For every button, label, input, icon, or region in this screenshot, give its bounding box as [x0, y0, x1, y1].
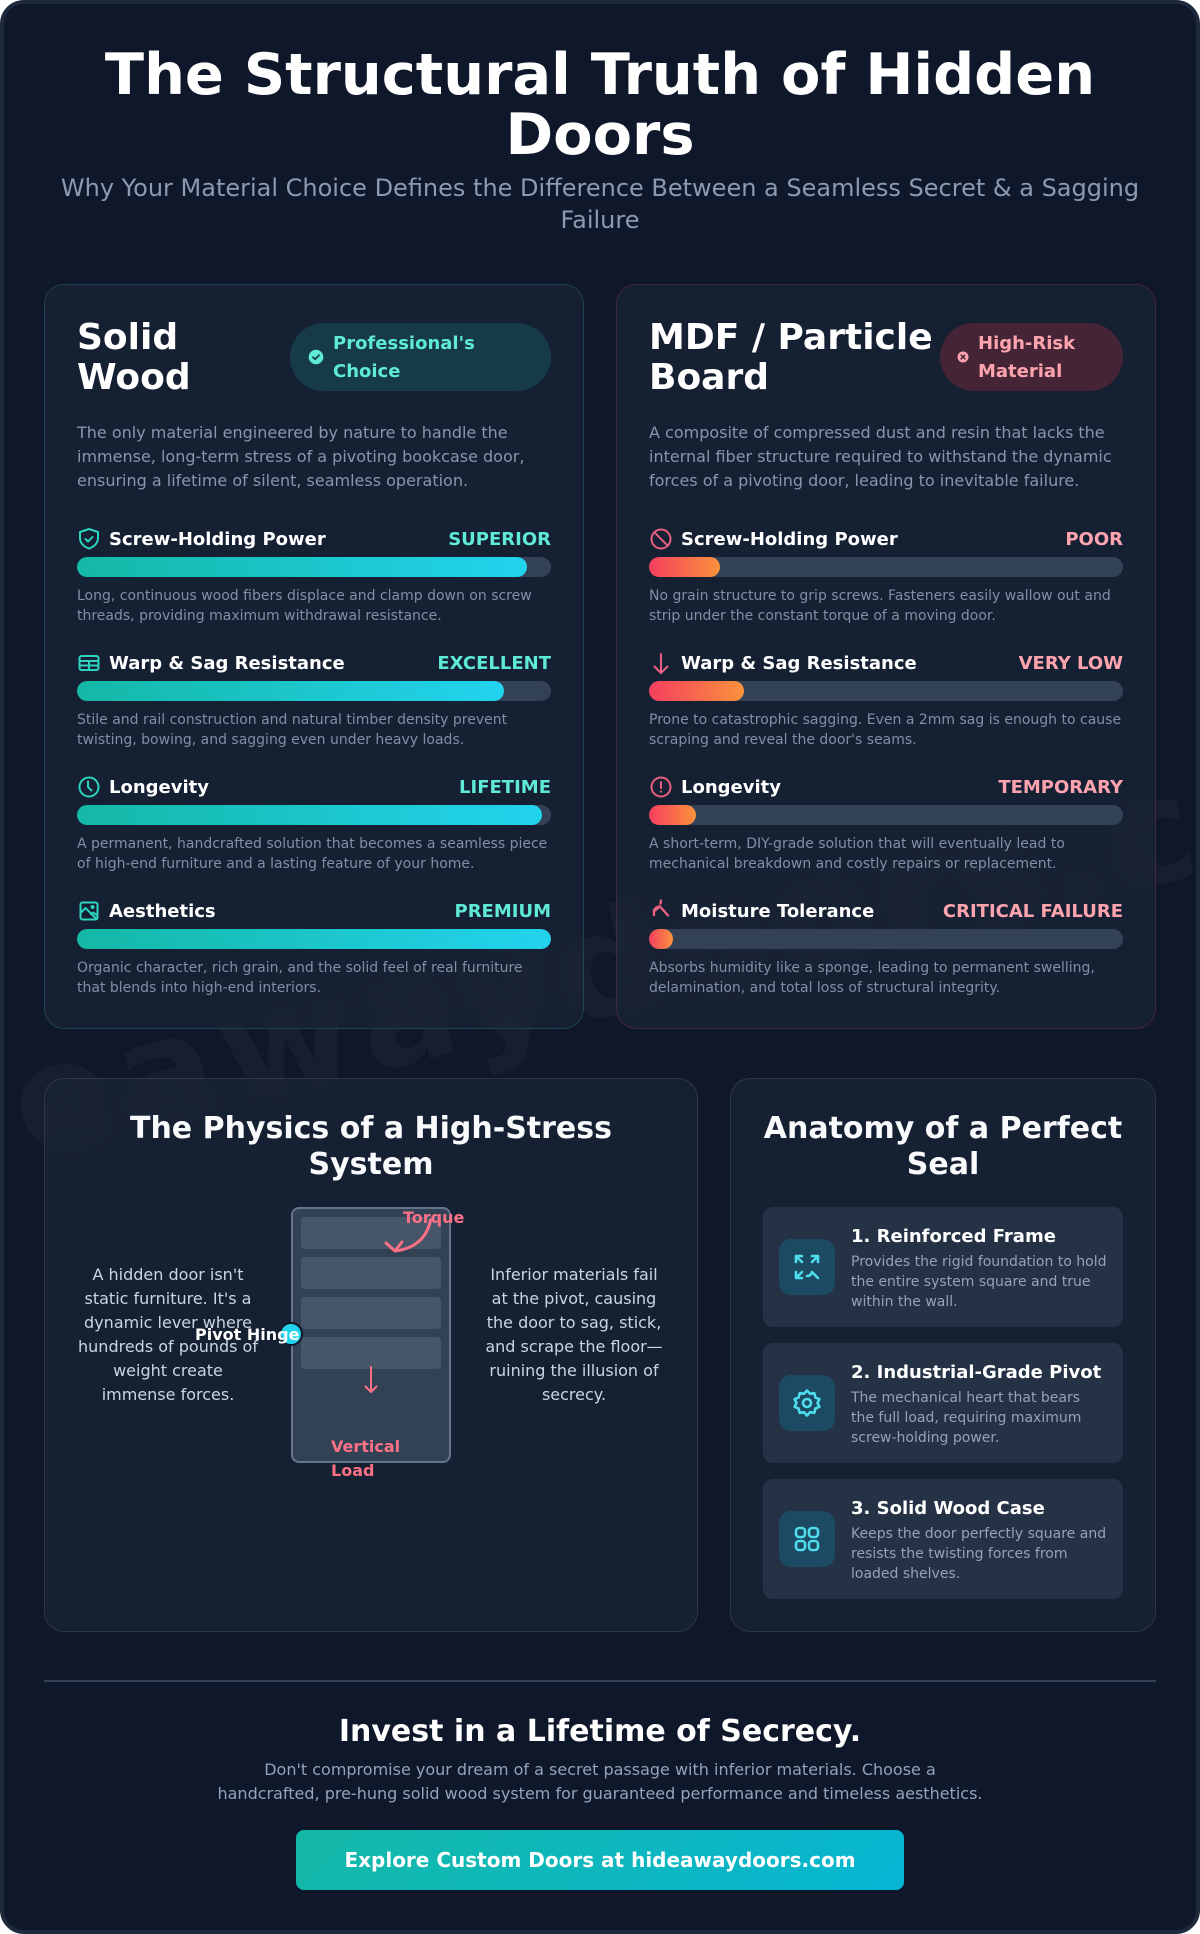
label: vertical load: Load [331, 1461, 374, 1480]
label: Warp & Sag Resistance [109, 653, 345, 674]
rating: SUPERIOR [448, 529, 551, 550]
metric: warp and sag resistance (MDF) [649, 653, 1123, 748]
progress bar [649, 929, 1123, 949]
label: vertical load: Vertical [331, 1437, 400, 1456]
badge: high-risk material [940, 323, 1123, 391]
hinge dot [279, 1322, 303, 1346]
icon: arrow down [654, 653, 668, 674]
shelf 2 [301, 1257, 441, 1289]
text: physics left: hundreds of pounds of [78, 1337, 258, 1356]
rating: TEMPORARY [998, 777, 1123, 798]
footer text [0, 1758, 1200, 1806]
label: Longevity [109, 777, 209, 798]
item text: screw-holding power. [851, 1430, 999, 1446]
rating: VERY LOW [1019, 653, 1123, 674]
description: MDF: forces of a pivoting door, leading to inevitable failure. [649, 471, 1079, 490]
progress bar [649, 681, 1123, 701]
explanation: scraping and reveal the door's seams. [649, 732, 917, 748]
text: physics right [485, 1265, 663, 1404]
badge text: Professional's [333, 333, 475, 354]
progress bar [77, 681, 551, 701]
item text: Provides the rigid foundation to hold [851, 1254, 1107, 1270]
heading: solid wood: Wood [77, 357, 191, 398]
explanation: threads, providing maximum withdrawal resistance. [77, 608, 442, 624]
explanation [649, 588, 1111, 624]
metric: longevity (wood) [77, 776, 551, 872]
explanation [649, 836, 1065, 872]
item text [851, 1252, 1107, 1312]
label: Aesthetics [109, 901, 216, 922]
metric: warp and sag resistance (wood) [77, 653, 551, 748]
text: physics right: the door to sag, stick, [487, 1313, 661, 1332]
footer heading: Invest in a Lifetime of Secrecy. [339, 1714, 861, 1749]
badge text: Material [978, 361, 1062, 382]
diagram: door [291, 1207, 451, 1463]
item text [851, 1388, 1081, 1448]
progress bar [77, 805, 551, 825]
explanation: Absorbs humidity like a sponge, leading to permanent swelling, [649, 960, 1095, 976]
progress bar [649, 805, 1123, 825]
shelf 1 [301, 1217, 441, 1249]
explanation [649, 712, 1121, 748]
text: physics left: dynamic lever where [84, 1313, 252, 1332]
progress bar [77, 557, 551, 577]
item title: 1. Reinforced Frame [851, 1226, 1056, 1247]
progress bar [77, 929, 551, 949]
explanation: mechanical breakdown and costly repairs or replacement. [649, 856, 1057, 872]
call to action button [296, 1830, 904, 1890]
label: Moisture Tolerance [681, 901, 874, 922]
metric: screw-holding power (wood) [77, 528, 551, 624]
text: physics right: ruining the illusion of [489, 1361, 659, 1380]
item: reinforced frame [763, 1207, 1123, 1327]
item title: 3. Solid Wood Case [851, 1498, 1045, 1519]
panel: anatomy [730, 1078, 1156, 1632]
label: vertical load [331, 1437, 400, 1480]
shelf 4 [301, 1337, 441, 1369]
metric: screw-holding power (MDF) [649, 528, 1123, 624]
icon: gear [779, 1375, 835, 1431]
metric: aesthetics (wood) [77, 901, 551, 996]
text: physics left [78, 1241, 404, 1404]
subtitle: Why Your Material Choice Defines the Difference Between a Seamless Secret & a Sagging [61, 174, 1139, 202]
icon: frame arrows [779, 1239, 835, 1295]
item text: The mechanical heart that bears [851, 1390, 1080, 1406]
explanation [77, 712, 507, 748]
item text [851, 1524, 1106, 1584]
item text: loaded shelves. [851, 1566, 960, 1582]
label: Longevity [681, 777, 781, 798]
subtitle [61, 174, 1139, 234]
rating: CRITICAL FAILURE [943, 901, 1123, 922]
explanation: twisting, bowing, and sagging even under heavy loads. [77, 732, 464, 748]
rating: EXCELLENT [437, 653, 551, 674]
footer text: handcrafted, pre-hung solid wood system for guaranteed performance and timeless aesthetics. [217, 1784, 982, 1803]
explanation: Long, continuous wood fibers displace and clamp down on screw [77, 588, 532, 604]
icon: x circle [958, 352, 968, 362]
text: physics right: Inferior materials fail [490, 1265, 658, 1284]
title: The Structural Truth of Hidden [105, 41, 1095, 108]
text: physics right: secrecy. [542, 1385, 606, 1404]
panel: MDF [616, 284, 1156, 1029]
text: physics left: A hidden door isn't [92, 1265, 244, 1284]
badge text: Choice [333, 361, 400, 382]
item text: within the wall. [851, 1294, 958, 1310]
heading: physics: The Physics of a High-Stress [130, 1111, 612, 1146]
title [105, 41, 1095, 168]
item: solid wood case [763, 1479, 1123, 1599]
icon: check circle [308, 350, 324, 364]
explanation: delamination, and total loss of structural integrity. [649, 980, 1000, 996]
heading: solid wood [77, 317, 191, 398]
explanation: No grain structure to grip screws. Fasteners easily wallow out and [649, 588, 1111, 604]
heading: MDF: MDF / Particle [649, 317, 933, 358]
panel: solid wood [44, 284, 584, 1029]
icon: ban [650, 528, 672, 550]
explanation: Stile and rail construction and natural timber density prevent [77, 712, 507, 728]
description: solid wood: immense, long-term stress of a pivoting bookcase door, [77, 447, 524, 466]
label: Warp & Sag Resistance [681, 653, 917, 674]
item: pivot [763, 1343, 1123, 1463]
explanation: strip under the constant torque of a moving door. [649, 608, 996, 624]
description: solid wood [76, 423, 524, 490]
icon: picture [80, 902, 98, 920]
heading: physics: System [309, 1147, 433, 1182]
item text: Keeps the door perfectly square and [851, 1526, 1106, 1542]
icon: table rows [78, 655, 100, 671]
label: Screw-Holding Power [109, 529, 326, 550]
rating: PREMIUM [454, 901, 551, 922]
text: physics left: weight create [113, 1361, 223, 1380]
title: Doors [506, 101, 694, 168]
text: physics left: static furniture. It's a [85, 1289, 251, 1308]
panel: physics [44, 1078, 698, 1632]
explanation [77, 836, 547, 872]
item title: 2. Industrial-Grade Pivot [851, 1362, 1101, 1383]
label: pivot hinge: Pivot Hinge [195, 1325, 299, 1344]
label: torque: Torque [403, 1208, 464, 1227]
description: MDF: internal fiber structure required to withstand the dynamic [649, 447, 1112, 466]
explanation [77, 588, 532, 624]
explanation: Organic character, rich grain, and the solid feel of real furniture [77, 960, 523, 976]
heading: anatomy [730, 1111, 1156, 1183]
subtitle: Failure [561, 206, 639, 234]
progress bar [649, 557, 1123, 577]
description: MDF [649, 423, 1112, 490]
heading: MDF: Board [649, 357, 769, 398]
text: physics left: immense forces. [102, 1385, 234, 1404]
explanation: Prone to catastrophic sagging. Even a 2mm sag is enough to cause [649, 712, 1121, 728]
explanation [649, 960, 1095, 996]
explanation: of high-end furniture and a lasting feature of your home. [77, 856, 474, 872]
rating: POOR [1065, 529, 1123, 550]
badge text: High-Risk [978, 333, 1075, 354]
icon: shield check [79, 528, 99, 550]
explanation: that blends into high-end interiors. [77, 980, 321, 996]
explanation [77, 960, 523, 996]
rating: LIFETIME [459, 777, 551, 798]
badge text [333, 333, 475, 382]
footer text: Don't compromise your dream of a secret passage with inferior materials. Choose a [264, 1760, 936, 1779]
explanation: A permanent, handcrafted solution that becomes a seamless piece [77, 836, 547, 852]
call to action button: Explore Custom Doors at hideawaydoors.com [344, 1848, 856, 1872]
badge: professional's choice [290, 323, 551, 391]
metric: longevity (MDF) [649, 776, 1124, 872]
explanation: A short-term, DIY-grade solution that will eventually lead to [649, 836, 1065, 852]
item text: resists the twisting forces from [851, 1546, 1068, 1562]
description: solid wood: ensuring a lifetime of silent, seamless operation. [77, 471, 468, 490]
item text: the entire system square and true [851, 1274, 1091, 1290]
metric: moisture tolerance (MDF) [649, 899, 1123, 996]
text: physics right: at the pivot, causing [492, 1289, 656, 1308]
heading: anatomy: Seal [907, 1147, 979, 1182]
icon: alert circle [650, 776, 672, 798]
shelf 3 [301, 1297, 441, 1329]
icon: moisture [652, 899, 670, 917]
icon: grid [779, 1511, 835, 1567]
description: solid wood: The only material engineered by nature to handle the [77, 423, 508, 442]
arrow: torque [384, 1218, 432, 1253]
heading: anatomy: Anatomy of a Perfect [764, 1111, 1122, 1146]
heading: solid wood: Solid [77, 317, 178, 358]
heading: physics [130, 1111, 612, 1182]
arrow: vertical load [364, 1366, 378, 1393]
badge text [978, 333, 1076, 382]
text: physics right: and scrape the floor— [485, 1337, 663, 1356]
label: Screw-Holding Power [681, 529, 898, 550]
description: MDF: A composite of compressed dust and resin that lacks the [649, 423, 1105, 442]
item text: the full load, requiring maximum [851, 1410, 1081, 1426]
heading: MDF [649, 317, 933, 398]
icon: clock [78, 776, 100, 798]
